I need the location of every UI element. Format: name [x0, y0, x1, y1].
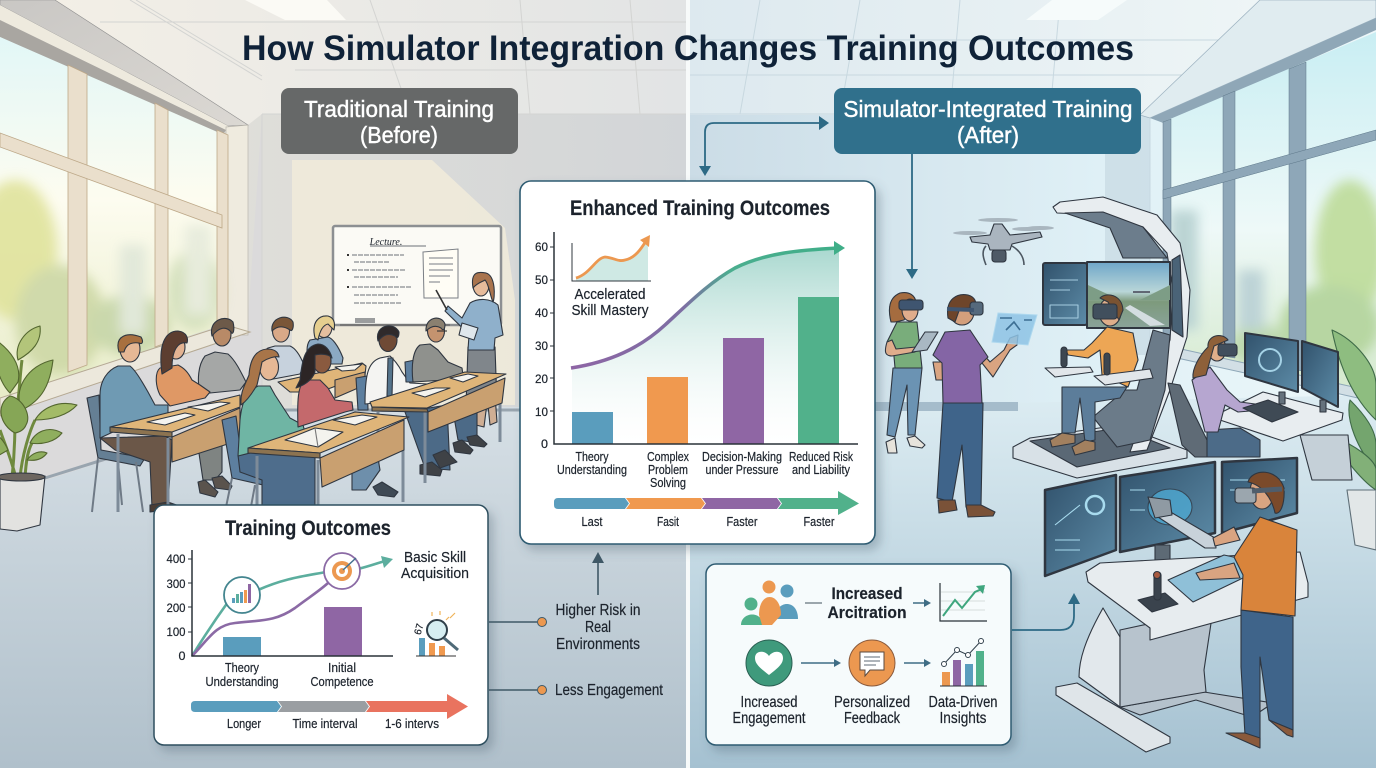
desk left [110, 395, 240, 512]
bar chart with growth curve: 30 [535, 339, 548, 353]
students in front row [222, 344, 409, 512]
timeline arrow: Fasit [657, 515, 679, 529]
whiteboard [333, 226, 501, 325]
holographic panel [992, 313, 1037, 345]
title: How Simulator Integration Changes Training Outcomes [242, 29, 1134, 68]
category labels: Problem [648, 463, 688, 477]
arrow: to trend chart [913, 599, 931, 607]
callout: higher risk: Higher Risk in [556, 602, 640, 619]
right window [1150, 32, 1376, 402]
student orange sweater [156, 331, 232, 497]
icon: feedback [849, 640, 895, 686]
student gray sweater with glasses [405, 318, 487, 454]
teacher [436, 272, 503, 427]
seated pilot [1045, 295, 1153, 455]
panel: training outcomes [154, 505, 488, 745]
callout: higher risk: Environments [556, 636, 640, 653]
student blue sweater [87, 335, 185, 512]
icon labels: Feedback [844, 710, 900, 727]
text: increased arcitration [828, 584, 906, 622]
student gray sweater [198, 318, 246, 394]
icon: magnifier with bars: 67 [413, 622, 426, 636]
category labels: Reduced Risk [789, 450, 854, 464]
bar chart with growth curve: 50 [535, 273, 548, 287]
drone [953, 218, 1054, 265]
icon: data bars [940, 638, 987, 686]
line and bar chart: 0 [178, 649, 186, 663]
icon: heart [746, 640, 792, 686]
arrow: from label to simulator scene [906, 154, 918, 279]
panel: enhanced training outcomes [520, 181, 875, 544]
timeline arrow: Faster [804, 515, 834, 529]
whiteboard heading: Lecture. [369, 237, 402, 248]
student white shirt with tie [356, 326, 457, 476]
axis labels: Competence [310, 675, 374, 689]
plant left [0, 326, 77, 531]
icon labels: Engagement [732, 710, 806, 727]
panel: simulator benefits [706, 564, 1011, 745]
right desk [370, 372, 506, 483]
timeline arrow: Time interval [292, 717, 358, 731]
label: simulator-integrated training [834, 88, 1141, 154]
bar chart with growth curve [535, 232, 858, 451]
icon labels: Insights [940, 710, 987, 727]
text: increased arcitration: Increased [832, 584, 902, 603]
student pink sweater [296, 344, 398, 497]
icon labels: Increased [740, 694, 798, 711]
heading: Training Outcomes [225, 517, 391, 540]
heading: Enhanced Training Outcomes [570, 197, 830, 220]
callout: less engagement [489, 682, 664, 699]
inset: accelerated skill mastery [572, 235, 651, 319]
category labels: under Pressure [706, 463, 779, 477]
timeline arrow: Faster [726, 515, 758, 529]
central divider [686, 0, 690, 768]
students in rear rows [264, 316, 506, 483]
category labels: Solving [650, 476, 686, 490]
timeline arrow: 1-6 intervs [385, 717, 439, 731]
inset: accelerated skill mastery: Skill Mastery [572, 303, 649, 319]
student teal sweater [222, 349, 315, 512]
bar chart with growth curve: 40 [535, 306, 548, 320]
left window [0, 37, 250, 416]
line and bar chart: 300 [166, 577, 186, 591]
icon labels: Data-Driven [928, 694, 998, 711]
simulator pod [1013, 197, 1190, 478]
operator workstation [1168, 333, 1352, 480]
arrow [904, 659, 931, 667]
woman with tablet in green shirt [885, 293, 938, 453]
icon labels [732, 694, 998, 727]
desk front [248, 412, 409, 510]
timeline arrow [191, 694, 468, 731]
category labels: Understanding [557, 463, 627, 477]
standing man in orange [1196, 472, 1297, 748]
icon: bars in circle [224, 577, 260, 613]
axis labels: Theory [225, 661, 260, 675]
student white-blue shirt [264, 317, 304, 380]
label: simulator-integrated training: (After) [957, 122, 1019, 148]
timeline arrow: Longer [227, 717, 261, 731]
bar chart with growth curve: 20 [535, 372, 548, 386]
line and bar chart: Acquisition [401, 566, 469, 582]
line and bar chart: 200 [166, 601, 186, 615]
category labels: Decision-Making [702, 450, 782, 464]
arrow: up to enhanced panel [592, 552, 604, 595]
category labels [557, 450, 854, 490]
man in purple shirt [933, 295, 1018, 517]
line and bar chart: Basic Skill [404, 550, 466, 566]
inset: accelerated skill mastery: Accelerated [574, 287, 646, 303]
arrow: benefits to console [1012, 593, 1080, 630]
text: increased arcitration: Arcitration [828, 603, 906, 622]
icon labels: Personalized [834, 694, 910, 711]
line and bar chart [166, 550, 469, 663]
category labels: Complex [647, 450, 690, 464]
icon: team [741, 580, 798, 625]
line and bar chart: 100 [166, 625, 186, 639]
label: traditional training: (Before) [360, 122, 438, 148]
bar chart with growth curve: 60 [535, 240, 548, 254]
bar chart with growth curve: 0 [541, 437, 548, 451]
timeline arrow [554, 491, 859, 529]
label: traditional training [281, 88, 518, 154]
icon: magnifier with bars [413, 611, 458, 656]
axis labels: Understanding [206, 675, 279, 689]
icon: target [324, 553, 360, 589]
left classroom background [0, 0, 688, 768]
desk back [278, 363, 366, 398]
bar chart with growth curve: 10 [535, 405, 548, 419]
students in left row [87, 318, 246, 512]
category labels: Theory [576, 450, 609, 464]
axis labels [206, 661, 374, 689]
category labels: and Liability [792, 463, 851, 477]
student blonde [307, 316, 343, 364]
main control console [1045, 458, 1308, 752]
icon: trend chart [940, 583, 987, 621]
callout: higher risk: Real [585, 619, 611, 636]
arrow [801, 659, 841, 667]
callout: higher risk [489, 602, 640, 653]
arrow: from label to enhanced outcomes [699, 116, 829, 176]
line and bar chart: 400 [166, 552, 186, 566]
axis labels: Initial [328, 661, 356, 675]
label: traditional training: Traditional Training [304, 96, 494, 122]
timeline arrow: Last [582, 515, 603, 529]
callout: less engagement: Less Engagement [555, 682, 664, 699]
label: simulator-integrated training: Simulator-Integrated Training [844, 96, 1132, 122]
plant right [1330, 330, 1376, 550]
right lab background [688, 0, 1376, 768]
